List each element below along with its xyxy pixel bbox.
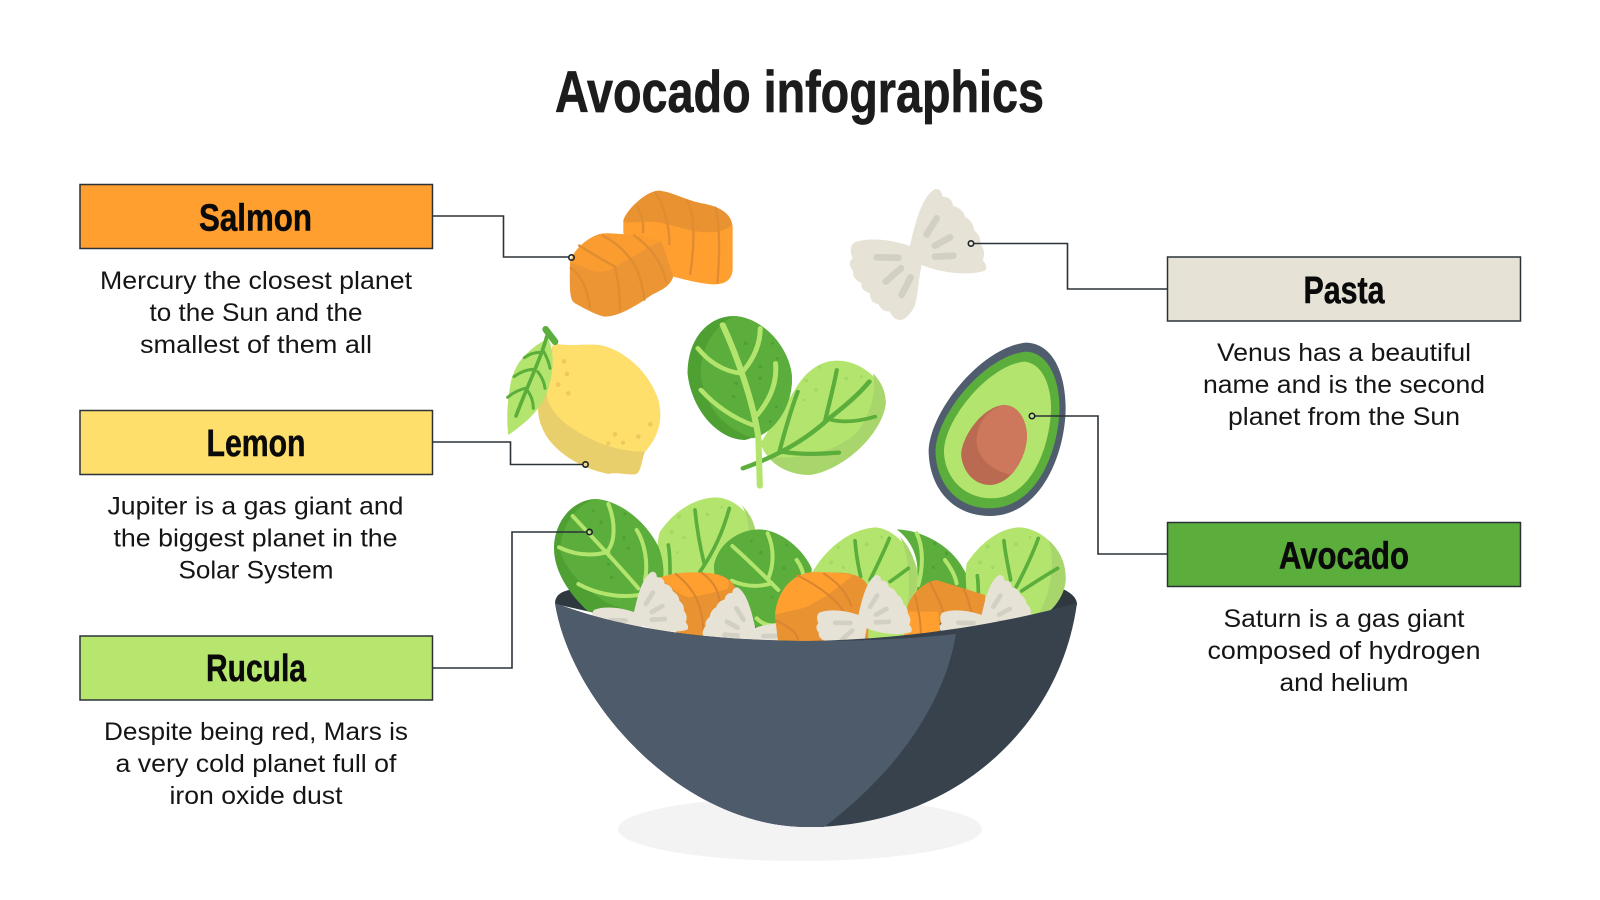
icon: avocado half [929, 343, 1066, 516]
pasta behind centre salmon [701, 587, 798, 680]
bowl inner rim [555, 583, 1077, 660]
connector: salmon [433, 216, 574, 260]
lemon description [108, 492, 404, 584]
avocado description: and helium [1280, 669, 1408, 697]
panel: lemon [80, 410, 432, 584]
rucula heading: Rucula [206, 648, 307, 690]
bowl body light side [555, 603, 956, 827]
bowl shadow [618, 797, 982, 861]
icon: salmon pieces [570, 191, 733, 317]
illustration: bowl with salad [554, 497, 1077, 861]
icon: lemon [507, 329, 660, 475]
pasta label box [1168, 257, 1520, 321]
salmon heading: Salmon [199, 198, 312, 240]
pasta description: Venus has a beautiful [1217, 339, 1471, 367]
illustration: floating ingredients [507, 189, 1066, 516]
salmon description [100, 267, 412, 359]
rucula description: Despite being red, Mars is [104, 718, 408, 746]
lemon label box [80, 410, 432, 474]
lemon heading: Lemon [206, 423, 306, 465]
lemon description: the biggest planet in the [114, 524, 398, 552]
panel: avocado [1168, 522, 1520, 697]
avocado label box [1168, 522, 1520, 586]
panel: rucula [80, 636, 432, 810]
pasta description: name and is the second [1203, 371, 1485, 399]
avocado description: composed of hydrogen [1208, 637, 1480, 665]
salmon centre and right in bowl [775, 572, 985, 643]
salad leaves right [810, 527, 1066, 642]
avocado description [1208, 605, 1480, 697]
avocado description: Saturn is a gas giant [1224, 605, 1465, 633]
lemon description: Jupiter is a gas giant and [108, 492, 404, 520]
salmon label box [80, 184, 432, 248]
salmon left in bowl [660, 572, 736, 640]
rucula label box [80, 636, 432, 700]
pasta left in bowl [591, 572, 688, 665]
pasta description: planet from the Sun [1228, 403, 1460, 431]
salmon description: to the Sun and the [150, 299, 362, 327]
icon: light spinach leaf [743, 361, 886, 475]
icon: farfalle pasta [850, 189, 986, 320]
panel: salmon [80, 184, 432, 359]
panel: pasta [1168, 257, 1520, 431]
pasta right in bowl [940, 575, 1035, 667]
avocado heading: Avocado [1279, 536, 1409, 578]
icon: dark spinach leaf [688, 316, 792, 486]
connector: pasta [968, 241, 1167, 289]
rucula description [104, 718, 408, 810]
salad leaves left [554, 497, 812, 630]
title: Avocado infographics [555, 60, 1044, 125]
salmon description: smallest of them all [140, 331, 372, 359]
salmon description: Mercury the closest planet [100, 267, 412, 295]
connector: rucula [433, 529, 592, 668]
connector: lemon [433, 442, 588, 467]
pasta description [1203, 339, 1485, 431]
pasta heading: Pasta [1304, 270, 1385, 312]
pasta centre in bowl [816, 575, 912, 667]
lemon description: Solar System [178, 556, 334, 584]
rucula description: a very cold planet full of [116, 750, 397, 778]
bowl body dark side [555, 603, 1077, 827]
rucula description: iron oxide dust [170, 782, 343, 810]
connector: avocado [1029, 413, 1167, 554]
